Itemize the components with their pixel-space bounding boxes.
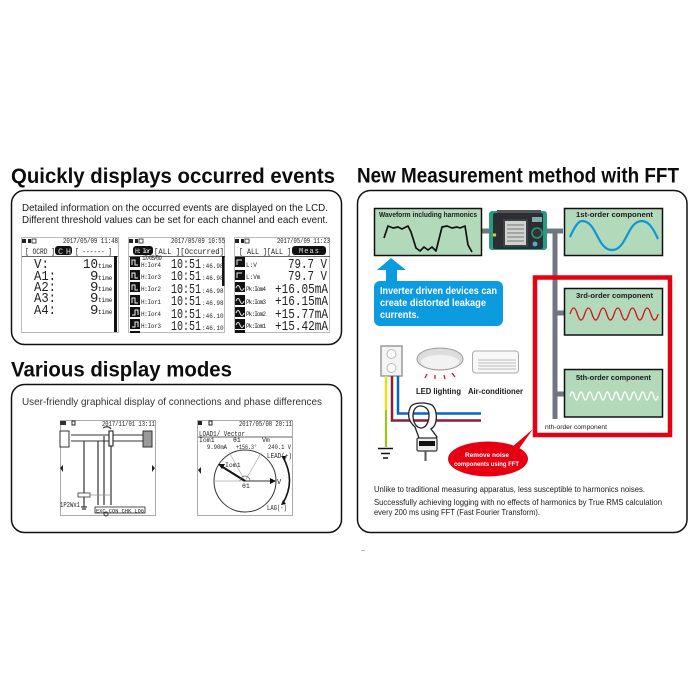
LCD screen: event counts: [ ------ ]: [75, 248, 112, 257]
LCD screen: event log: 10:51: [171, 294, 201, 310]
LCD screen: vector diagram: θ1: [233, 437, 241, 444]
text block: FFT explanation: Successfully achieving logging with no effects of harmonics by True RMS calculation: [374, 497, 662, 507]
box: 1st-order component: 1st-order component: [576, 210, 654, 219]
LCD screen: event log: 10:51: [171, 269, 201, 285]
LCD screen: event log: H:Ior3: [141, 323, 161, 330]
LCD screen: event counts: time: [98, 275, 113, 282]
callout: remove noise components using FFT: Remove noise: [465, 452, 509, 459]
LCD screen: event counts: 9: [90, 291, 98, 307]
LCD screen: event log: H:Ior2: [141, 286, 161, 293]
connector lines: [482, 231, 564, 419]
LCD screen: wiring diagram: [60, 420, 156, 516]
panel: display modes: [12, 384, 342, 532]
LCD screen: measured values: 79.7 V: [288, 257, 327, 273]
LCD screen: measured values: L:V: [246, 262, 257, 269]
LCD screen: event counts: A2:: [34, 280, 56, 296]
LCD screen: measured values: +16.05mA: [275, 282, 328, 298]
LCD screen: vector diagram: θ1: [242, 483, 250, 490]
LCD screen: wiring diagram: 2017/11/01 13:11: [102, 421, 155, 429]
LCD screen: event log: 2017/05/09 10:55: [171, 238, 225, 246]
panel: occurred events: [12, 190, 342, 347]
callout: inverter driven devices: [374, 281, 503, 326]
box: 5th-order component: [564, 370, 662, 417]
LCD screen: event log: :46.10: [202, 325, 224, 332]
LCD screen: event counts: 10: [83, 257, 98, 273]
LCD screen: vector diagram: Iom1: [199, 437, 215, 444]
LCD screen: measured values: 2017/05/09 11:23: [277, 238, 330, 246]
LCD screen: event log: H:Ior4: [141, 311, 161, 318]
text block: events description: Detailed information on the occurred events are displayed on the LCD.: [22, 202, 328, 214]
icon: LED lighting: [417, 348, 463, 379]
LCD screen: event counts: 9: [90, 280, 98, 296]
LCD screen: measured values: [234, 237, 330, 333]
LCD screen: vector diagram: 240.1 V: [268, 444, 291, 451]
LCD screen: event log: 10:51: [171, 307, 201, 323]
LCD screen: event log: :46.98: [202, 288, 224, 295]
LCD screen: event log: H:Ior1: [141, 299, 161, 306]
LCD screen: event counts: 2017/05/09 11:48: [63, 238, 118, 246]
callout: inverter driven devices: Inverter driven devices can: [380, 285, 497, 297]
heading: various display modes: Various display modes: [11, 358, 232, 382]
LCD screen: vector diagram: LEAD(+): [267, 453, 292, 461]
LCD screen: event log: 10:51: [171, 331, 201, 347]
box: 1st-order component: [564, 208, 662, 256]
LCD screen: measured values: Pk:Iom4: [246, 286, 266, 293]
LCD screen: vector diagram: 9.90mA: [207, 444, 227, 451]
LCD screen: event log: H: Ior: [135, 248, 151, 255]
arrow: up to waveform: [377, 258, 406, 281]
LCD screen: event counts: time: [98, 286, 113, 293]
LCD screen: event log: :46.98: [202, 300, 224, 307]
callout: remove noise components using FFT: [448, 429, 533, 476]
wiring: [386, 376, 481, 447]
LCD screen: vector diagram: LAG(-): [267, 505, 287, 513]
text block: display modes description: User-friendly graphical display of connections and phase differences: [22, 396, 322, 408]
text block: FFT explanation: Unlike to traditional measuring apparatus, less susceptible to harmonics noises.: [374, 484, 645, 494]
panel: FFT measurement: [358, 190, 687, 532]
text block: events description: [22, 202, 328, 226]
text block: FFT explanation: every 200 ms using FFT (Fast Fourier Transform).: [374, 507, 540, 517]
callout: inverter driven devices: currents.: [380, 309, 419, 321]
LCD screen: event log: [ALL ][Occurred]: [154, 248, 224, 257]
icon: measuring device: [489, 210, 547, 250]
LCD screen: event log: [128, 237, 225, 333]
LCD screen: vector diagram: Iom1: [225, 462, 241, 469]
LCD screen: wiring diagram: 1P2Wx1: [60, 502, 80, 510]
box: waveform including harmonics: [374, 208, 482, 256]
LCD screen: event log: :46.10: [202, 313, 224, 320]
LCD screen: event log: H:Ior4: [141, 262, 161, 269]
LCD screen: vector diagram: +156.3°: [236, 443, 257, 451]
LCD screen: event counts: 9: [90, 269, 98, 285]
LCD screen: measured values: L:Vm: [246, 274, 261, 281]
LCD screen: measured values: +16.15mA: [275, 294, 328, 310]
LCD screen: measured values: Meas: [299, 248, 319, 256]
label: LED lighting: LED lighting: [416, 387, 461, 396]
LCD screen: event log: :46.98: [202, 263, 224, 270]
box: 3rd-order component: 3rd-order component: [576, 291, 654, 300]
LCD screen: measured values: +15.42mA: [275, 319, 328, 335]
icon: air conditioner: [472, 351, 518, 373]
LCD screen: measured values: Pk:Iom3: [246, 299, 266, 306]
callout: remove noise components using FFT: components using FFT: [454, 461, 519, 468]
LCD screen: event counts: time: [98, 297, 113, 304]
LCD screen: measured values: 79.7 V: [288, 269, 327, 285]
LCD screen: event counts: [22, 238, 118, 332]
text block: FFT explanation: [374, 484, 662, 517]
LCD screen: event counts: time: [98, 263, 113, 270]
LCD screen: event log: H:Ior3: [141, 274, 161, 281]
LCD screen: event counts: CH: [58, 247, 71, 257]
label: nth-order component: nth-order component: [545, 424, 607, 431]
LCD screen: measured values: [ ALL ][ALL ]: [239, 248, 291, 257]
heading: quickly displays occurred events: Quickly displays occurred events: [11, 165, 335, 188]
LCD screen: vector diagram: LOAD1/ Vector: [199, 431, 245, 439]
LCD screen: measured values: +15.77mA: [275, 307, 328, 323]
LCD screen: event counts: A3:: [34, 291, 56, 307]
LCD screen: vector diagram: [198, 420, 292, 516]
LCD screen: vector diagram: 2017/05/08 20:11: [239, 421, 292, 429]
LCD screen: event counts: 9: [90, 303, 98, 319]
LCD screen: event counts: time: [98, 309, 113, 316]
LCD screen: event counts: A1:: [34, 269, 56, 285]
LCD screen: event log: 10:51: [171, 257, 201, 273]
highlight frame: noise components: [535, 278, 670, 435]
icon: wall outlet: [381, 346, 402, 376]
callout: inverter driven devices: create distorted leakage: [380, 297, 486, 309]
LCD screen: measured values: +16.05mA: [275, 331, 328, 347]
text block: events description: Different threshold values can be set for each channel and each event.: [22, 214, 328, 226]
LCD screen: event counts: A4:: [34, 303, 56, 319]
box: 5th-order component: 5th-order component: [576, 373, 651, 382]
box: 3rd-order component: [564, 288, 662, 335]
LCD screen: vector diagram: V: [277, 479, 282, 487]
LCD screen: event counts: V:: [34, 257, 49, 273]
icon: clamp sensor: [409, 403, 437, 461]
LCD screen: vector diagram: Vm: [262, 437, 270, 444]
LCD screen: event log: 10:51: [171, 319, 201, 335]
LCD screen: event log: 10:51: [171, 282, 201, 298]
LCD screen: wiring diagram: EXC CON CHK LOG: [96, 508, 144, 514]
box: waveform including harmonics: Waveform including harmonics: [379, 210, 477, 219]
icon: ground symbol: [378, 448, 393, 458]
LCD screen: event log: 17/05/09: [142, 255, 162, 262]
LCD screen: measured values: Pk:Iom2: [246, 311, 266, 318]
LCD screen: measured values: Pk:Iom1: [246, 323, 266, 330]
LCD screen: event log: :46.98: [202, 275, 224, 282]
label: air-conditioner: Air-conditioner: [468, 387, 523, 396]
LCD screen: event counts: [ OCRD ]: [25, 248, 55, 257]
